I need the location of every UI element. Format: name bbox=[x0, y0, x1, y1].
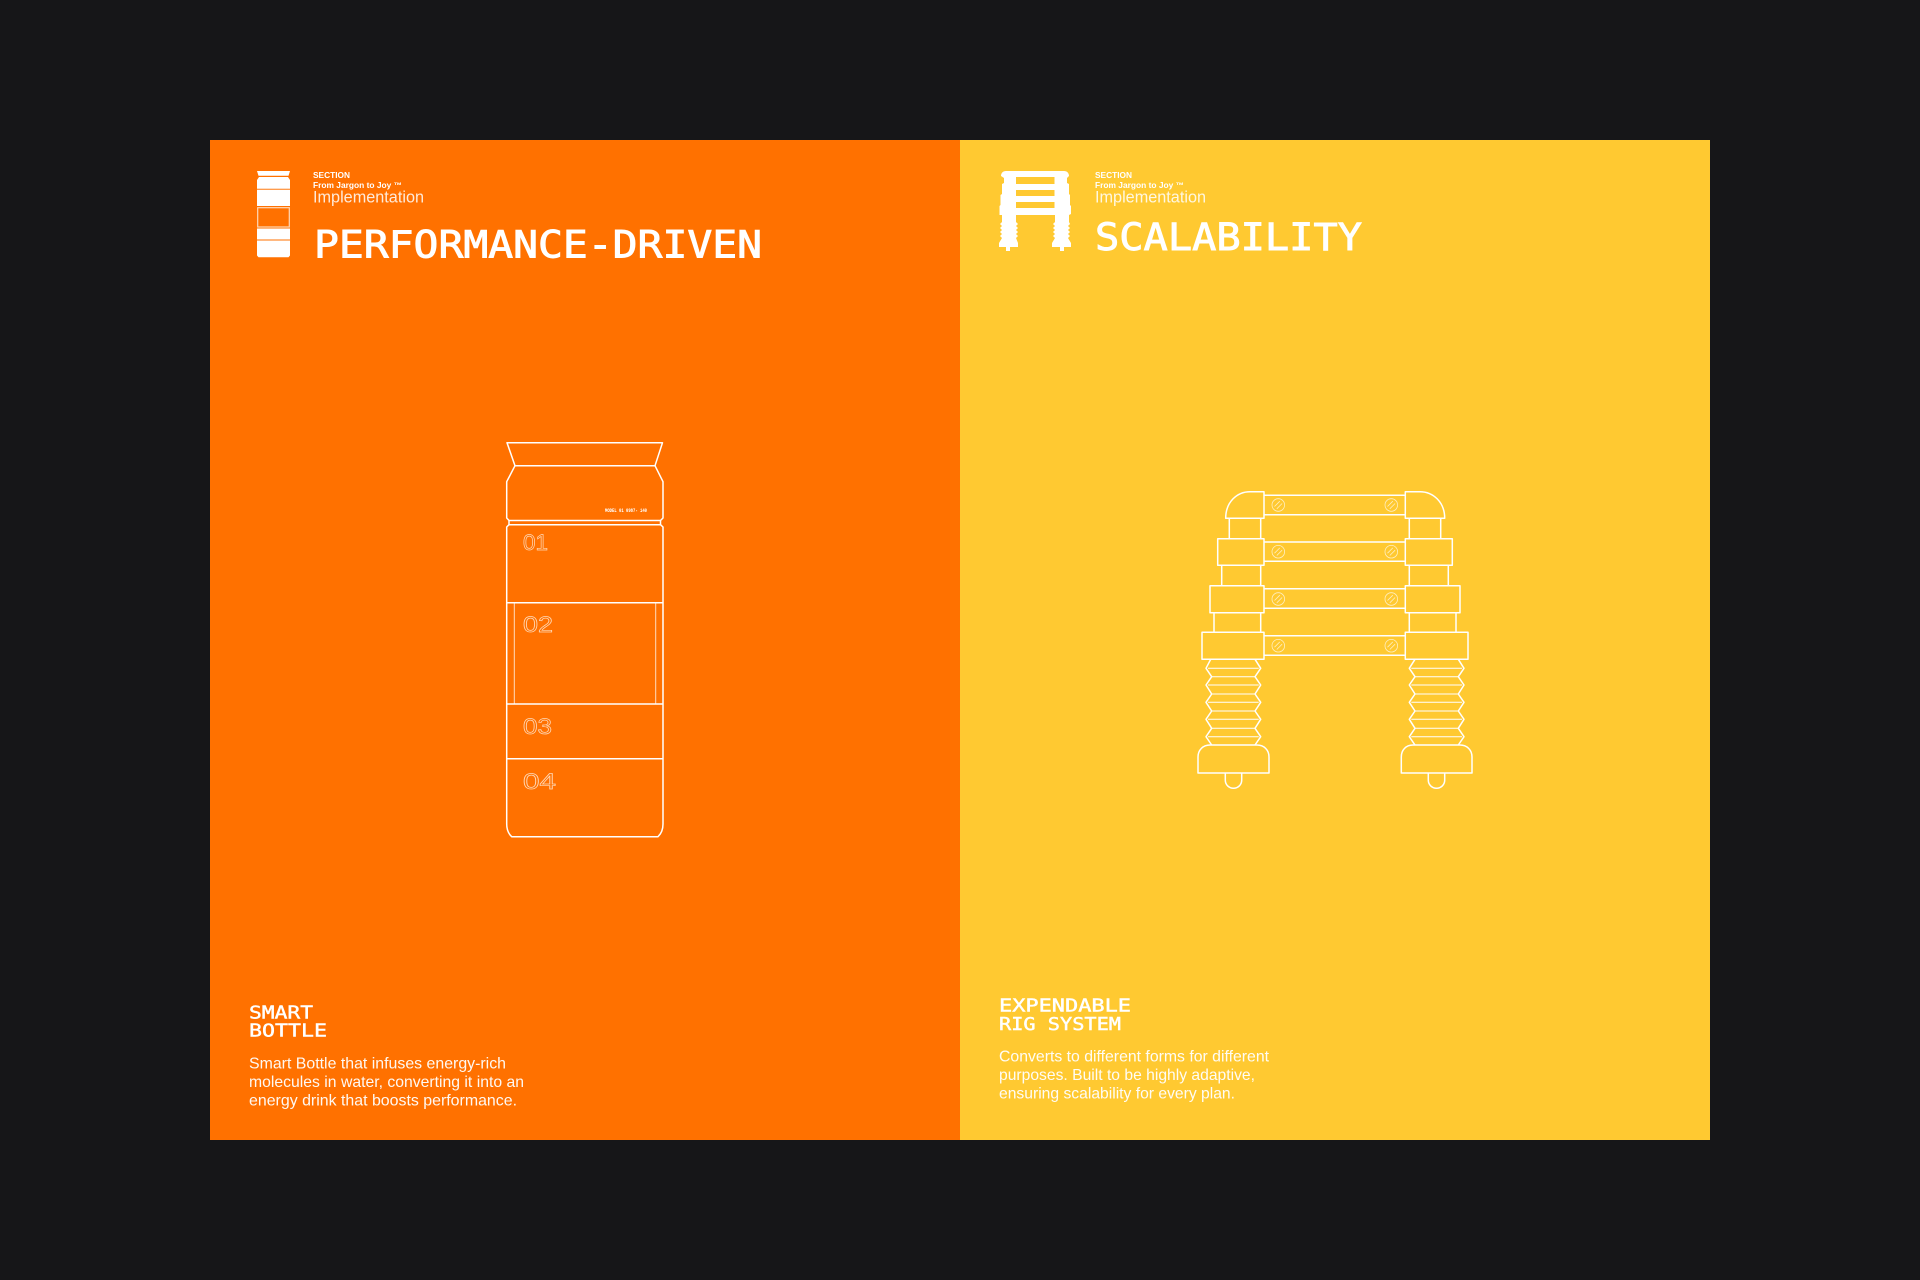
rig heading: EXPENDABLE bbox=[999, 996, 1131, 1016]
section label: From Jargon to Joy ™ bbox=[313, 181, 402, 190]
icon: small bottle bbox=[257, 171, 290, 257]
rig heading: RIG SYSTEM bbox=[999, 1015, 1121, 1035]
section dividers bbox=[507, 603, 663, 759]
rig description: purposes. Built to be highly adaptive, bbox=[999, 1067, 1255, 1084]
rig line drawing bbox=[1198, 492, 1472, 788]
smart bottle line drawing bbox=[507, 443, 663, 837]
rig description: ensuring scalability for every plan. bbox=[999, 1086, 1235, 1103]
section label: SECTION bbox=[313, 171, 350, 180]
rig description bbox=[999, 1049, 1270, 1103]
section label bbox=[1095, 171, 1206, 207]
section label: Implementation bbox=[313, 189, 424, 207]
rungs bbox=[1264, 495, 1405, 655]
bottle body bbox=[507, 525, 663, 837]
right foot bbox=[1401, 745, 1472, 788]
panel: scalability bbox=[960, 140, 1710, 1140]
left bellows bbox=[1206, 659, 1261, 745]
section label: SECTION bbox=[1095, 171, 1132, 180]
icon: small rig bbox=[999, 171, 1071, 251]
right bellows bbox=[1409, 659, 1464, 745]
right column bbox=[1405, 492, 1468, 659]
section label: Implementation bbox=[1095, 189, 1206, 207]
bottle shoulder bbox=[507, 466, 663, 525]
smart bottle description: energy drink that boosts performance. bbox=[249, 1092, 517, 1109]
panel: performance-driven bbox=[210, 140, 960, 1140]
section label bbox=[313, 171, 424, 207]
left column bbox=[1202, 492, 1264, 659]
inner label lines bbox=[514, 603, 656, 704]
number 03: 03 bbox=[523, 714, 552, 739]
bottle cap bbox=[507, 443, 662, 466]
number 01: 01 bbox=[523, 530, 548, 555]
left foot bbox=[1198, 745, 1269, 788]
model number: MODEL 01 0987- 140 bbox=[605, 507, 647, 514]
rig heading bbox=[999, 996, 1131, 1035]
smart bottle heading: BOTTLE bbox=[249, 1021, 327, 1042]
title: SCALABILITY bbox=[1095, 216, 1362, 259]
smart bottle heading: SMART bbox=[249, 1002, 313, 1023]
smart bottle description: molecules in water, converting it into an bbox=[249, 1074, 524, 1091]
smart bottle description: Smart Bottle that infuses energy-rich bbox=[249, 1055, 506, 1072]
number 04: 04 bbox=[523, 769, 556, 794]
number 02: 02 bbox=[523, 612, 553, 637]
screws bbox=[1272, 499, 1398, 652]
section label: From Jargon to Joy ™ bbox=[1095, 181, 1184, 190]
smart bottle description bbox=[249, 1055, 524, 1109]
smart bottle heading bbox=[249, 1002, 327, 1042]
title: PERFORMANCE-DRIVEN bbox=[314, 223, 762, 266]
rig description: Converts to different forms for different bbox=[999, 1049, 1270, 1066]
